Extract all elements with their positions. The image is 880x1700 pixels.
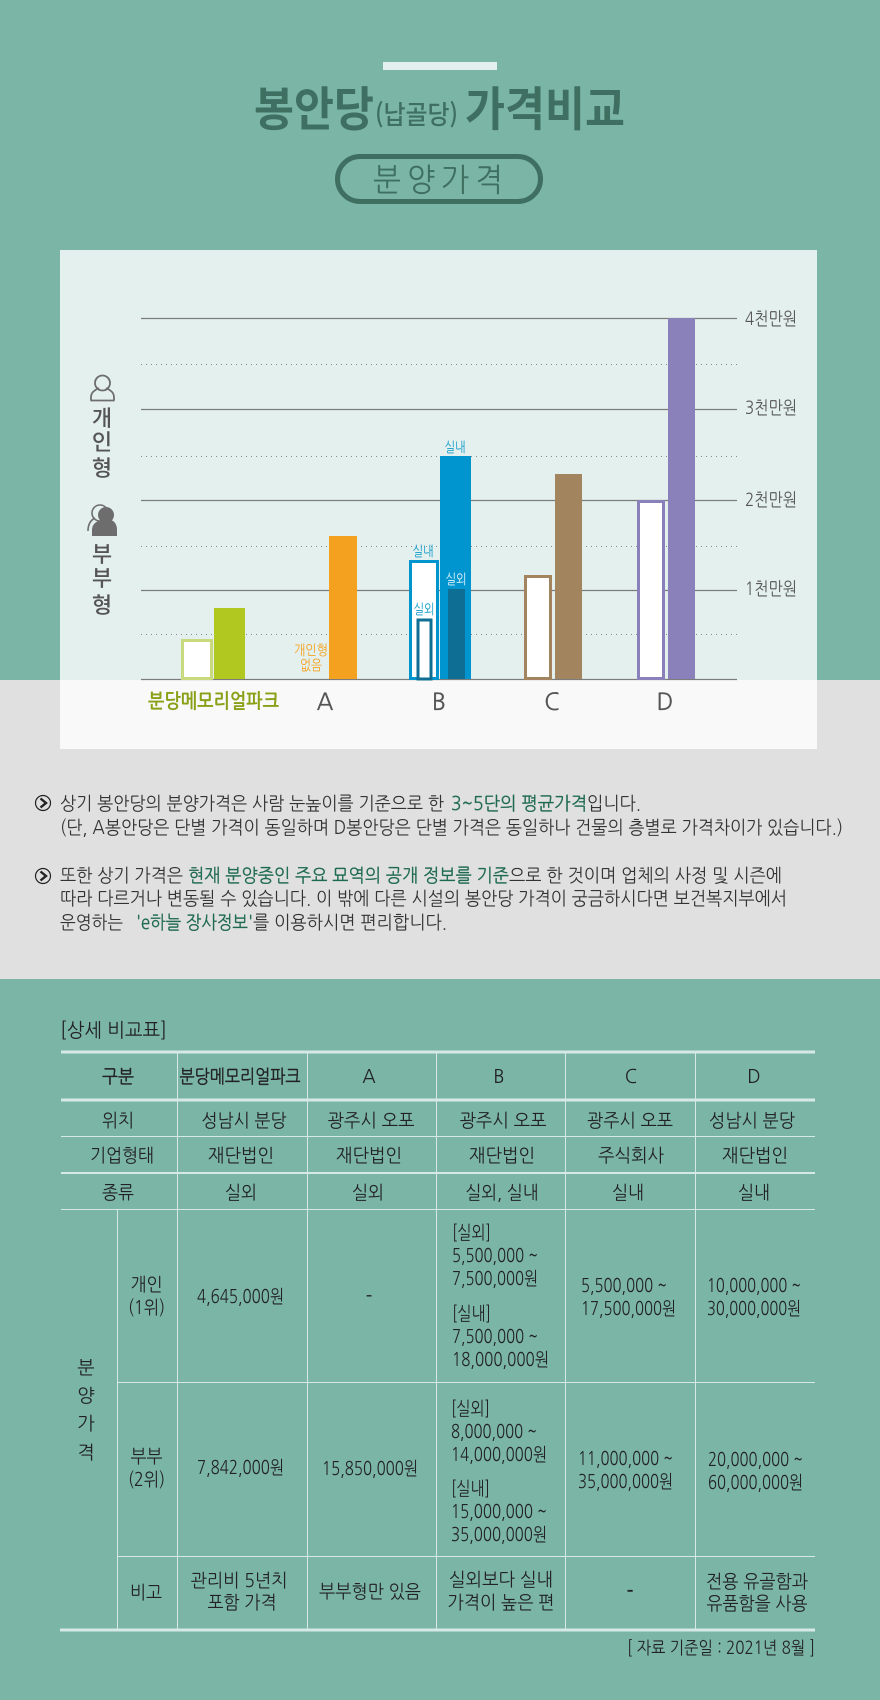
- y axis labels: 3천만원: [745, 399, 797, 417]
- comparison table: [60, 1052, 815, 1630]
- row: individual price: 17,500,000원: [581, 1299, 676, 1318]
- legend: couple type: 부: [92, 537, 112, 569]
- note 1: [36, 794, 843, 837]
- row: company type: 재단법인: [722, 1146, 788, 1165]
- y axis labels: [745, 310, 797, 598]
- subtitle pill: 양: [407, 164, 435, 196]
- row: couple price: 15,000,000 ~: [451, 1502, 547, 1521]
- bars: Bundang Memorial Park: [182, 608, 245, 679]
- row: company type: 재단법인: [336, 1146, 402, 1165]
- row: couple price: 14,000,000원: [451, 1445, 547, 1464]
- title accent bar: [383, 62, 497, 70]
- row: kind: [102, 1183, 770, 1202]
- note 2: 'e하늘 장사정보': [136, 913, 253, 932]
- bars: B: [410, 440, 471, 679]
- row: kind: 실외: [352, 1183, 384, 1202]
- row: remarks: 실외보다 실내: [449, 1570, 553, 1589]
- note 2: 운영하는: [60, 913, 123, 932]
- row: individual price: 10,000,000 ~: [707, 1276, 801, 1295]
- subtitle pill: 격: [475, 164, 503, 196]
- table header row: B: [493, 1067, 505, 1086]
- icon: single person: [90, 376, 114, 400]
- subtitle pill: 분: [373, 164, 401, 196]
- row: couple price: [실외]: [451, 1399, 490, 1418]
- side label: sale price: 가: [77, 1414, 95, 1433]
- note 2: 를 이용하시면 편리합니다.: [253, 913, 447, 932]
- row: company type: [90, 1146, 788, 1165]
- x axis labels: A: [317, 691, 334, 714]
- bars: A: [294, 536, 357, 679]
- row: remarks: 부부형만 있음: [319, 1582, 421, 1601]
- row: individual price: (1위): [128, 1298, 165, 1317]
- row: kind: 실내: [738, 1183, 770, 1202]
- side label: sale price: 격: [77, 1443, 95, 1462]
- table header row: A: [362, 1067, 376, 1086]
- header: [254, 62, 625, 202]
- row: couple price: 20,000,000 ~: [708, 1450, 803, 1469]
- note 2: 현재 분양중인 주요 묘역의 공개 정보를 기준: [188, 866, 509, 885]
- row: location: 광주시 오포: [328, 1111, 414, 1130]
- bars: D: [638, 318, 695, 679]
- table header row: D: [747, 1067, 761, 1086]
- row: individual price: 5,500,000 ~: [452, 1246, 538, 1265]
- legend: couple type: 부: [92, 561, 112, 593]
- table heading: [상세 비교표]: [60, 1020, 167, 1040]
- row: company type: 기업형태: [90, 1146, 154, 1165]
- row: remarks: 관리비 5년치: [190, 1571, 288, 1590]
- legend: individual type: 인: [92, 425, 112, 457]
- legend: individual type: [90, 376, 114, 483]
- row: remarks: 전용 유골함과: [706, 1572, 809, 1591]
- row: location: 위치: [102, 1111, 134, 1130]
- row: remarks: [130, 1570, 809, 1613]
- y axis labels: 4천만원: [745, 310, 797, 328]
- title: 봉안당: [254, 71, 374, 140]
- icon: bullet arrow: [36, 868, 50, 884]
- bars: C: [526, 474, 582, 679]
- legend: couple type: 형: [92, 588, 112, 620]
- row: company type: 재단법인: [208, 1146, 274, 1165]
- note 2: 으로 한 것이며 업체의 사정 및 시즌에: [509, 866, 782, 885]
- y axis labels: 2천만원: [745, 491, 797, 509]
- bars: A: 개인형: [294, 643, 328, 658]
- row: couple price: 8,000,000 ~: [451, 1422, 537, 1441]
- row: remarks: 포함 가격: [208, 1593, 276, 1612]
- row: individual price: [실외]: [452, 1223, 491, 1242]
- x axis labels: D: [657, 691, 673, 714]
- bars: B: 실외: [414, 602, 434, 617]
- table header row: C: [625, 1067, 637, 1086]
- row: location: 광주시 오포: [460, 1111, 546, 1130]
- bars: B: 실내: [444, 440, 466, 455]
- row: couple price: 부부: [130, 1447, 162, 1466]
- row: individual price: [실내]: [452, 1304, 491, 1323]
- subtitle pill: 가: [441, 164, 469, 196]
- row: individual price: 개인: [130, 1275, 162, 1294]
- row: company type: 재단법인: [469, 1146, 535, 1165]
- note 1: 상기 봉안당의 분양가격은 사람 눈높이를 기준으로 한: [60, 794, 445, 813]
- legend: individual type: 형: [92, 451, 112, 483]
- icon: bullet arrow: [36, 796, 50, 810]
- row: kind: 실외, 실내: [466, 1183, 538, 1202]
- y axis labels: 1천만원: [745, 580, 797, 598]
- row: couple price: (2위): [128, 1470, 165, 1489]
- row: couple price: 7,842,000원: [197, 1458, 284, 1477]
- row: individual price: 4,645,000원: [197, 1287, 284, 1306]
- x axis labels: 분당메모리얼파크: [148, 691, 279, 711]
- table header row: 분당메모리얼파크: [180, 1067, 300, 1086]
- row: remarks: 가격이 높은 편: [448, 1593, 554, 1612]
- row: kind: 실내: [612, 1183, 644, 1202]
- bars: B: 실내: [412, 544, 434, 559]
- legend: couple type: [88, 505, 117, 620]
- row: individual price: -: [366, 1287, 372, 1306]
- row: couple price: 60,000,000원: [708, 1473, 803, 1492]
- row: company type: 주식회사: [598, 1146, 664, 1165]
- footnote: data date: [ 자료 기준일 : 2021년 8월 ]: [627, 1639, 815, 1657]
- title: 가격비교: [465, 71, 625, 140]
- notes: [36, 794, 843, 932]
- x axis labels: B: [432, 691, 446, 714]
- note 1: 입니다.: [587, 794, 641, 813]
- row: individual price: [128, 1223, 801, 1369]
- side label: sale price: [77, 1358, 95, 1462]
- row: couple price: [128, 1399, 803, 1544]
- row: remarks: 비고: [130, 1583, 162, 1602]
- note 2: [36, 866, 787, 932]
- legend: individual type: 개: [92, 401, 112, 433]
- x axis labels: [148, 691, 673, 714]
- side label: sale price: 양: [77, 1386, 95, 1405]
- row: remarks: -: [627, 1582, 633, 1601]
- row: couple price: [실내]: [451, 1479, 490, 1498]
- panel: price chart: [60, 250, 817, 749]
- x axis labels: C: [544, 691, 560, 714]
- row: couple price: 35,000,000원: [451, 1525, 547, 1544]
- icon: couple: [88, 505, 117, 536]
- note 1: (단, A봉안당은 단별 가격이 동일하며 D봉안당은 단별 가격은 동일하나 건물의 층별로 가격차이가 있습니다.): [60, 818, 843, 837]
- row: couple price: 35,000,000원: [578, 1472, 673, 1491]
- row: kind: 종류: [102, 1183, 134, 1202]
- row: individual price: 18,000,000원: [452, 1350, 549, 1369]
- row: location: [102, 1111, 796, 1130]
- subtitle pill: [338, 156, 540, 202]
- side label: sale price: 분: [77, 1358, 95, 1377]
- table header row: [102, 1067, 761, 1086]
- row: couple price: 11,000,000 ~: [578, 1449, 673, 1468]
- row: kind: 실외: [225, 1183, 257, 1202]
- row: individual price: 7,500,000원: [452, 1269, 538, 1288]
- note 1: 3~5단의 평균가격: [451, 794, 587, 813]
- row: location: 성남시 분당: [202, 1111, 287, 1130]
- table header row: 구분: [102, 1067, 134, 1086]
- note 2: 또한 상기 가격은: [60, 866, 183, 885]
- row: couple price: 15,850,000원: [322, 1459, 418, 1478]
- row: individual price: 7,500,000 ~: [452, 1327, 538, 1346]
- row: remarks: 유품함을 사용: [706, 1594, 808, 1613]
- title: [254, 71, 625, 140]
- row: location: 성남시 분당: [709, 1111, 796, 1130]
- bars: A: 없음: [300, 658, 322, 673]
- title: (납골당): [375, 95, 458, 132]
- bars: B: 실외: [446, 572, 466, 587]
- row: individual price: 30,000,000원: [707, 1299, 801, 1318]
- note 2: 따라 다르거나 변동될 수 있습니다. 이 밖에 다른 시설의 봉안당 가격이 궁금하시다면 보건복지부에서: [60, 889, 787, 908]
- row: location: 광주시 오포: [587, 1111, 673, 1130]
- row: individual price: 5,500,000 ~: [581, 1276, 667, 1295]
